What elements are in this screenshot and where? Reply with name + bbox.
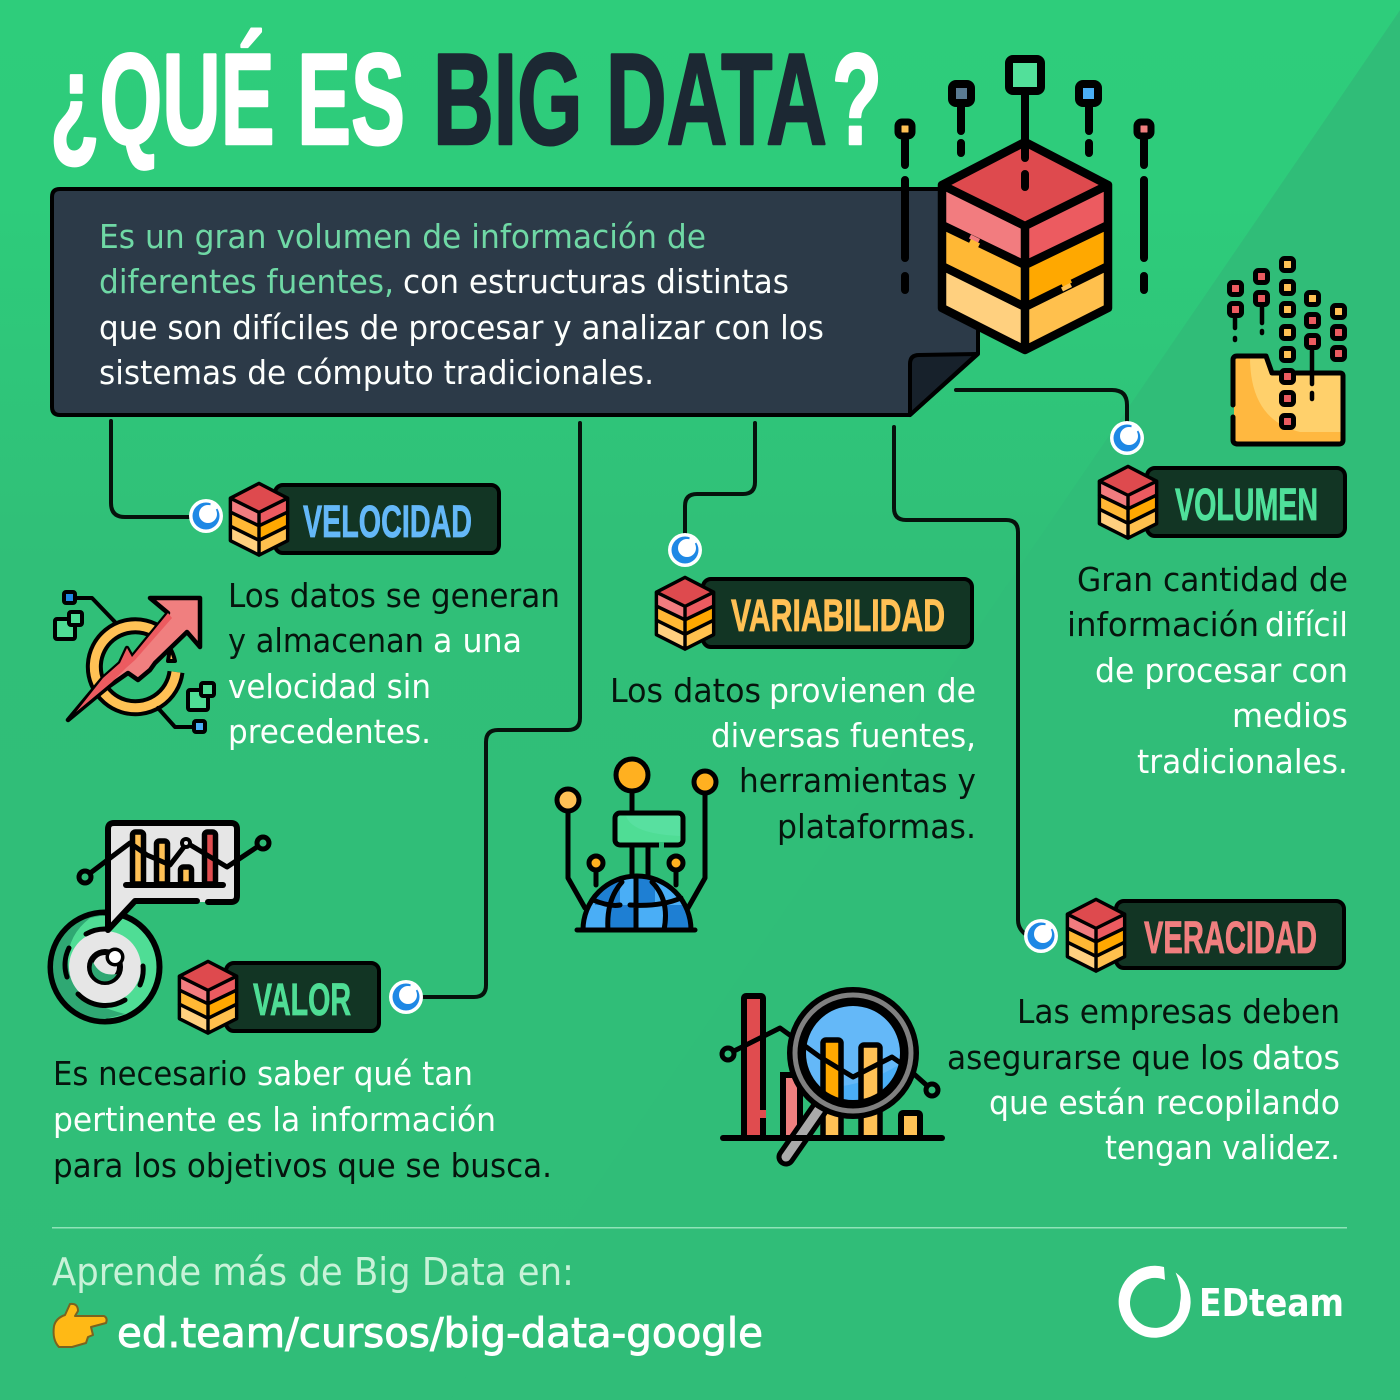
text: volumen: de procesar con [1095, 651, 1348, 690]
label badge [275, 485, 499, 553]
panel: volumen [1067, 421, 1348, 781]
icon: cube [230, 483, 288, 555]
label badge: VELOCIDAD [303, 496, 472, 547]
connector node [1024, 919, 1058, 953]
icon: data target [50, 823, 269, 1022]
text: variabilidad: diversas fuentes, [711, 716, 976, 755]
icon: cube [656, 577, 714, 649]
logo: EDteam [1119, 1266, 1344, 1338]
label badge [703, 579, 972, 647]
text: velocidad: velocidad sin [228, 667, 431, 706]
label badge: VOLUMEN [1175, 479, 1318, 530]
text: variabilidad: plataformas. [777, 807, 976, 846]
title [50, 26, 882, 172]
definition text: Es un gran volumen de información de [99, 217, 706, 256]
text: volumen: Gran cantidad de [1077, 560, 1348, 599]
text: variabilidad: herramientas y [739, 761, 976, 800]
title: ¿QUÉ ES [50, 26, 405, 172]
text: variabilidad: Los datos [610, 671, 761, 710]
icon: magnifier chart [722, 995, 942, 1157]
text: veracidad: que están recopilando [989, 1083, 1340, 1122]
text: valor: saber qué tan [257, 1054, 473, 1093]
panel: variabilidad [557, 533, 976, 930]
definition text: con estructuras distintas [403, 262, 789, 301]
icon: big data cube [898, 59, 1151, 350]
text: volumen: difícil [1265, 605, 1348, 644]
connector node [1110, 421, 1144, 455]
label badge [1147, 468, 1345, 536]
title: BIG DATA [433, 26, 827, 172]
text: valor: Es necesario [53, 1054, 247, 1093]
title: ? [832, 26, 882, 172]
text: valor: para los objetivos que se busca. [53, 1146, 552, 1185]
definition text: que son difíciles de procesar y analizar con los [99, 308, 824, 347]
definition text: sistemas de cómputo tradicionales. [99, 353, 654, 392]
icon: speed arrow [55, 592, 214, 732]
label badge: VARIABILIDAD [731, 590, 945, 641]
definition text [99, 217, 824, 392]
text: valor: pertinente es la información [53, 1100, 496, 1139]
footer call to action [52, 1250, 763, 1357]
connector lines [111, 390, 1127, 997]
text: velocidad: y almacenan [228, 621, 424, 660]
definition text: diferentes fuentes, [99, 262, 394, 301]
text: volumen [1067, 560, 1348, 781]
icon: cube [179, 961, 237, 1033]
text: veracidad [947, 992, 1340, 1167]
text: valor [53, 1054, 552, 1185]
footer call to action: ed.team/cursos/big-data-google [117, 1309, 763, 1357]
text: veracidad: Las empresas deben [1017, 992, 1340, 1031]
label badge: VALOR [253, 974, 351, 1025]
text: veracidad: tengan validez. [1105, 1128, 1340, 1167]
panel: definition box [52, 189, 978, 415]
text: velocidad [228, 576, 560, 751]
icon: cube [1099, 466, 1157, 538]
text: veracidad: datos [1252, 1038, 1340, 1077]
text: veracidad: asegurarse que los [947, 1038, 1244, 1077]
icon: folder with data [1230, 258, 1344, 444]
connector node [189, 499, 223, 533]
panel: valor [50, 823, 552, 1185]
icon: pointing hand [54, 1304, 107, 1347]
text: velocidad: Los datos se generan [228, 576, 560, 615]
text: volumen: medios [1232, 696, 1348, 735]
text: volumen: información [1067, 605, 1259, 644]
text: volumen: tradicionales. [1137, 742, 1348, 781]
text: variabilidad: provienen de [769, 671, 976, 710]
connector node [389, 980, 423, 1014]
icon: globe network [557, 759, 716, 930]
icon: cube [1067, 899, 1125, 971]
connector node [668, 533, 702, 567]
panel: velocidad [55, 483, 560, 751]
text: velocidad: a una [433, 621, 522, 660]
label badge [226, 963, 379, 1031]
text: velocidad: precedentes. [228, 712, 431, 751]
panel: veracidad [722, 899, 1344, 1167]
text: variabilidad [610, 671, 976, 846]
footer call to action: Aprende más de Big Data en: [52, 1250, 574, 1294]
logo: EDteam: EDteam [1199, 1281, 1344, 1325]
label badge [1116, 901, 1344, 968]
